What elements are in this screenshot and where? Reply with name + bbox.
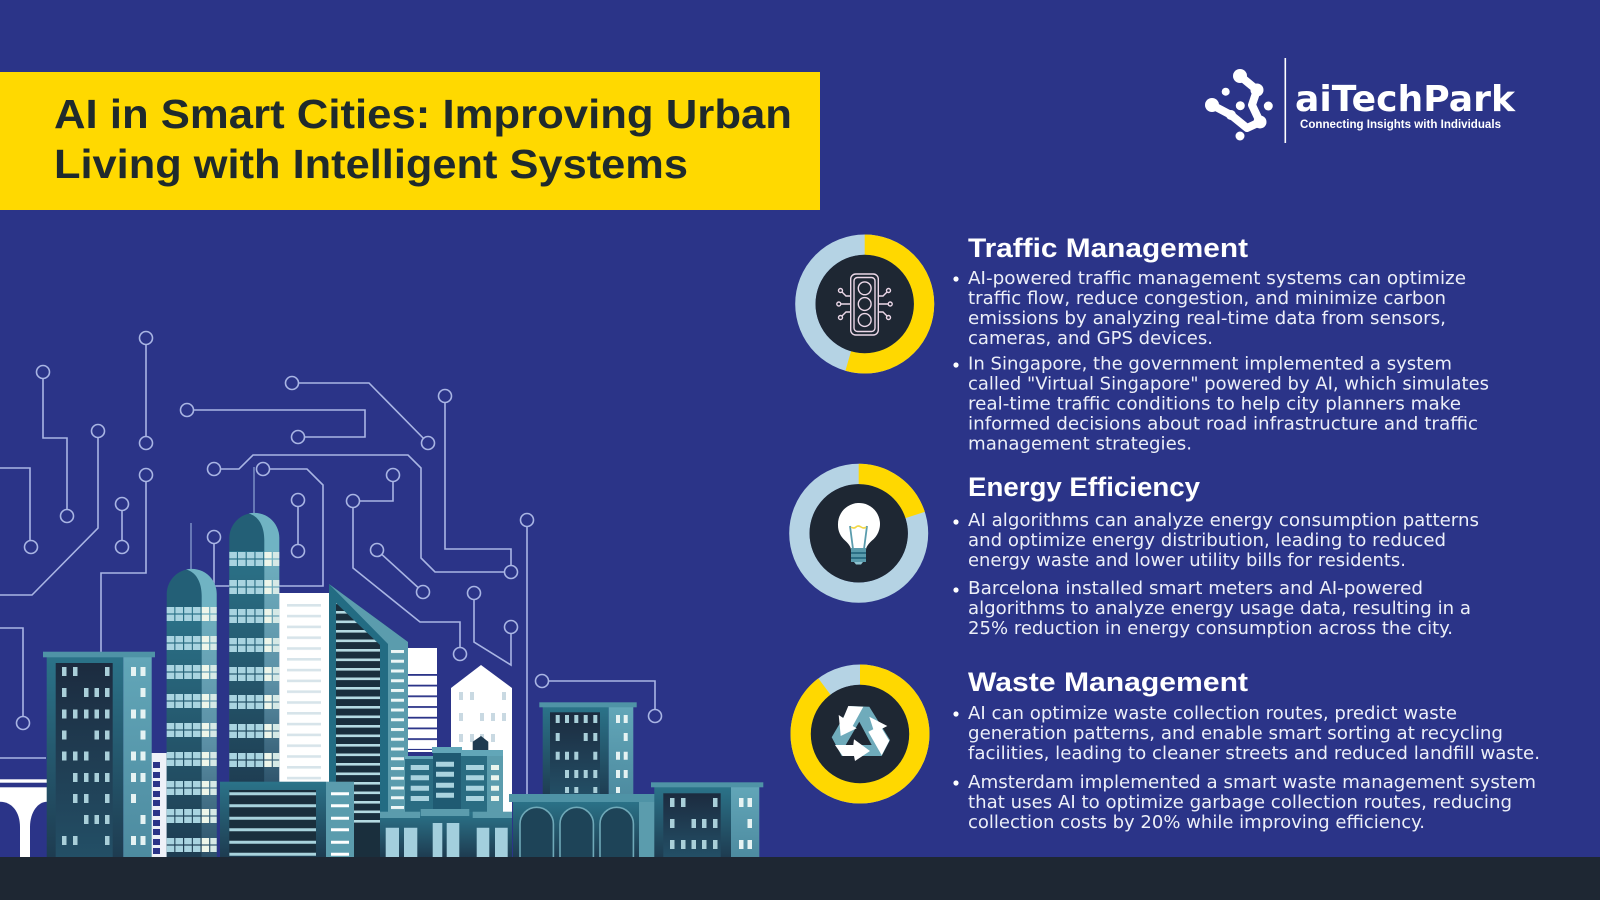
text: traffic bullet two xyxy=(953,354,1489,454)
text: traffic bullet one: traffic flow, reduce congestion, and minimize carbon xyxy=(968,289,1446,309)
footer bar xyxy=(0,857,1600,900)
text: traffic bullet two: called "Virtual Singapore" powered by AI, which simulates xyxy=(968,374,1489,394)
text: traffic bullet one xyxy=(953,269,1466,349)
building: left tower block xyxy=(43,652,155,857)
building: low colonnade xyxy=(380,809,512,857)
panel: waste management xyxy=(801,667,1540,833)
building: arcade xyxy=(509,794,655,857)
text: energy bullet two xyxy=(953,579,1471,639)
text: traffic bullet one: cameras, and GPS devices. xyxy=(968,329,1213,349)
text: energy bullet one: and optimize energy distribution, leading to reduced xyxy=(968,531,1446,551)
building: lower centre block xyxy=(220,782,354,857)
heading: waste management: Waste Management xyxy=(968,667,1248,697)
building: white house xyxy=(451,665,512,812)
text: energy bullet two: algorithms to analyze energy usage data, resulting in a xyxy=(968,599,1471,619)
panel: traffic management xyxy=(805,233,1489,454)
text: waste bullet two: Amsterdam implemented a smart waste management system xyxy=(968,773,1536,793)
ring chart: energy xyxy=(799,474,918,593)
text: waste bullet one: AI can optimize waste collection routes, predict waste xyxy=(968,704,1457,724)
building: white tower xyxy=(279,593,329,783)
text: traffic bullet one: emissions by analyzing real-time data from sensors, xyxy=(968,309,1446,329)
building: right block xyxy=(651,782,763,857)
text: energy bullet one: AI algorithms can analyze energy consumption patterns xyxy=(968,511,1479,531)
small white building xyxy=(151,753,167,857)
panel: energy efficiency xyxy=(799,472,1479,639)
building: domed tower two xyxy=(229,513,279,790)
text: waste bullet two: collection costs by 20% while improving efficiency. xyxy=(968,813,1425,833)
text: energy bullet one xyxy=(953,511,1479,571)
logo tagline: Connecting Insights with Individuals xyxy=(1300,119,1501,131)
text: waste bullet two: that uses AI to optimize garbage collection routes, reducing xyxy=(968,793,1512,813)
ring chart: traffic xyxy=(805,245,924,363)
text: traffic bullet one: AI-powered traffic management systems can optimize xyxy=(968,269,1466,289)
text: traffic bullet two: informed decisions about road infrastructure and traffic xyxy=(968,414,1478,434)
title xyxy=(54,91,792,187)
title: Living with Intelligent Systems xyxy=(54,141,688,187)
title: AI in Smart Cities: Improving Urban xyxy=(54,91,792,137)
ring chart: waste xyxy=(801,675,919,793)
text: traffic bullet two: real-time traffic conditions to help city planners make xyxy=(968,394,1461,414)
text: energy bullet two: 25% reduction in energy consumption across the city. xyxy=(968,619,1453,639)
logo icon xyxy=(1205,69,1273,140)
city skyline illustration xyxy=(0,513,763,857)
icon: smart traffic light xyxy=(837,274,892,335)
building: domed tower one xyxy=(167,569,217,857)
icon: light bulb xyxy=(838,503,880,564)
heading: energy efficiency: Energy Efficiency xyxy=(968,472,1200,502)
text: waste bullet one: generation patterns, and enable smart sorting at recycling xyxy=(968,724,1503,744)
text: waste bullet one: facilities, leading to cleaner streets and reduced landfill waste. xyxy=(968,744,1540,764)
logo: aiTechPark xyxy=(1205,58,1516,143)
building: sloped glass tower xyxy=(329,584,408,857)
logo wordmark: aiTechPark xyxy=(1295,79,1516,120)
icon: recycling arrows xyxy=(832,706,890,761)
building: white block with blue stripes xyxy=(408,648,437,752)
text: traffic bullet two: In Singapore, the government implemented a system xyxy=(968,354,1452,374)
text: traffic bullet two: management strategies. xyxy=(968,434,1192,454)
text: waste bullet two xyxy=(953,773,1536,833)
building: mid teal block xyxy=(405,736,503,813)
circuit lines xyxy=(0,332,662,795)
title banner xyxy=(0,72,820,210)
heading: traffic management: Traffic Management xyxy=(968,233,1248,263)
text: energy bullet one: energy waste and lower utility bills for residents. xyxy=(968,551,1406,571)
text: energy bullet two: Barcelona installed smart meters and AI-powered xyxy=(968,579,1423,599)
bridge xyxy=(0,779,47,857)
building: back block xyxy=(539,702,637,797)
text: waste bullet one xyxy=(953,704,1540,764)
